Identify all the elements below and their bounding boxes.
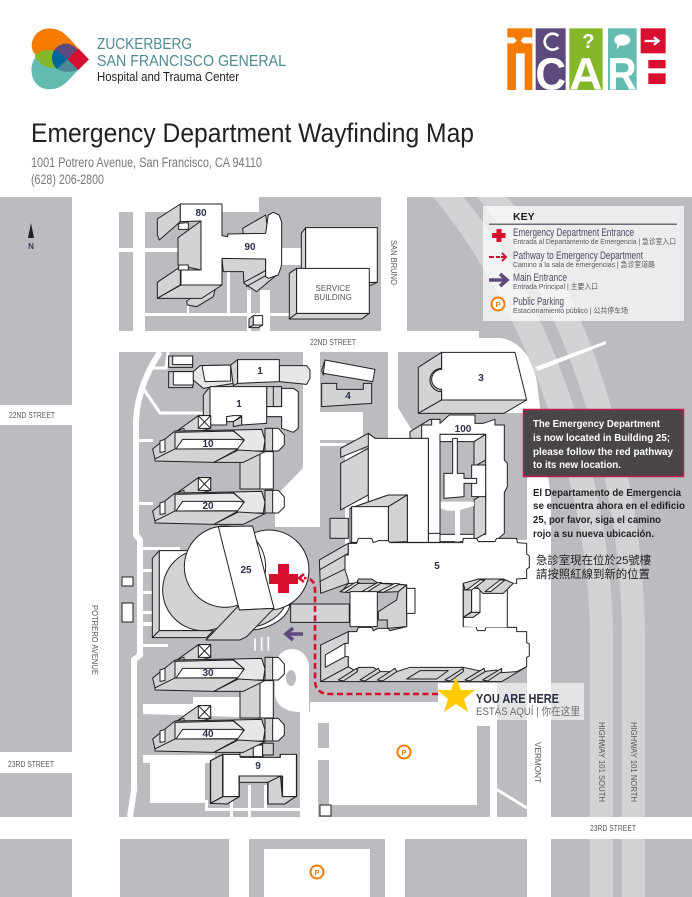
label: estas aqui: ESTÁS AQUÍ | 你在这里 (476, 704, 580, 718)
north arrow (28, 223, 34, 251)
text block: chinese notice: 請按照紅線到新的位置 (536, 567, 650, 581)
icon: purple arrow (489, 274, 507, 286)
callout: english notice: to its new location. (533, 459, 621, 471)
row: main entrance (513, 272, 598, 291)
header logo: Zuckerberg SFGH (31, 28, 286, 89)
street labels: HIGHWAY 101 SOUTH (597, 722, 606, 802)
row: emergency entrance (513, 227, 676, 246)
label: 30: 30 (202, 668, 214, 679)
parking markers: P (401, 748, 407, 757)
row: pathway: Camino a la sala de emergencias | 急诊室道路 (513, 259, 655, 269)
label: 1 upper: 1 (257, 366, 263, 377)
icon: main entrance arrow (286, 628, 303, 640)
label: 40: 40 (202, 729, 214, 740)
small outbuildings (122, 577, 331, 816)
logo mark (31, 28, 89, 89)
icon: red cross (269, 564, 298, 593)
header logo: I CARE: A (569, 48, 603, 99)
building 40 wing (153, 706, 284, 752)
building 10 wing (153, 416, 284, 462)
street labels: 22ND STREET (9, 411, 55, 420)
street labels (8, 240, 638, 833)
arrowhead of pathway (299, 574, 304, 582)
row: public parking (513, 296, 628, 315)
label: 1 lower: 1 (236, 399, 242, 410)
service building (289, 228, 377, 319)
street labels: 22ND STREET (310, 338, 356, 347)
icon: parking (492, 298, 504, 310)
you are here panel (437, 677, 584, 720)
logo wordmark: SAN FRANCISCO GENERAL (97, 53, 286, 70)
street labels: POTRERO AVENUE (90, 605, 99, 675)
address: 1001 Potrero Avenue, San Francisco, CA 94110 (31, 155, 262, 170)
text block: spanish notice: se encuentra ahora en el edificio (533, 500, 685, 512)
building 3 and 4 (322, 352, 527, 413)
row: main entrance: Entrada Principal | 主要入口 (513, 281, 598, 291)
icon: parking: P (495, 300, 501, 309)
label: service building: SERVICE (316, 284, 350, 293)
row: pathway (513, 250, 655, 269)
street labels: 23RD STREET (590, 824, 636, 833)
map base: city blocks and roads (0, 197, 692, 897)
text block: spanish notice: rojo a su nueva ubicación. (533, 528, 654, 540)
parking markers: P (314, 868, 320, 877)
label: 5: 5 (434, 561, 440, 572)
label: 10: 10 (202, 439, 214, 450)
building 30 wing (153, 645, 284, 691)
red dashed pathway (304, 578, 438, 694)
connector between 10 and 20 (240, 452, 273, 489)
label: 100: 100 (455, 424, 472, 435)
small outbuilding near 22nd street (249, 316, 263, 328)
street labels: HIGHWAY 101 NORTH (629, 722, 638, 802)
row: public parking: Public Parking (513, 296, 564, 308)
parking markers (310, 746, 410, 878)
phone: (628) 206-2800 (31, 172, 104, 187)
label: 3: 3 (478, 373, 484, 384)
label: service building (314, 284, 352, 302)
row: emergency entrance: Entrada al Departamento de Emergencia | 急诊室入口 (513, 236, 676, 246)
text block: chinese notice: 急診室現在位於25號樓 (536, 553, 651, 567)
text block: spanish notice (533, 487, 685, 540)
connector between 30 and 40 (240, 681, 273, 718)
north arrow: N (28, 242, 34, 251)
icon: star (437, 677, 475, 712)
callout: english notice: is now located in Building 25; (533, 432, 670, 444)
label: 90: 90 (244, 242, 256, 253)
building 20 wing (153, 478, 284, 524)
key heading: KEY (513, 211, 535, 223)
title: Emergency Department Wayfinding Map (31, 118, 474, 148)
buildings 80 and 90 (157, 204, 282, 307)
label: service building: BUILDING (314, 293, 352, 302)
icon: dashed arrow (489, 253, 506, 261)
buildings 1 (169, 356, 310, 432)
logo wordmark: ZUCKERBERG (97, 36, 192, 53)
row: public parking: Estacionamiento público | 公共停车场 (513, 305, 628, 315)
label: 25: 25 (240, 565, 252, 576)
callout: english notice: please follow the red pathway (533, 446, 673, 458)
row: emergency entrance: Emergency Department Entrance (513, 227, 634, 239)
icon: cross (492, 229, 506, 242)
street labels: 23RD STREET (8, 760, 54, 769)
header logo: I CARE (507, 28, 666, 99)
building 100 (410, 415, 507, 542)
label: 9: 9 (255, 761, 261, 772)
text block: spanish notice: 25, por favor, siga el camino (533, 514, 661, 526)
street labels: SAN BRUNO (389, 240, 398, 285)
logo wordmark (97, 36, 286, 84)
header logo: I CARE: R (607, 48, 637, 99)
text block: chinese notice (536, 553, 651, 581)
building 25 (152, 526, 349, 651)
text block: spanish notice: El Departamento de Emergencia (533, 487, 681, 499)
logo wordmark: Hospital and Trauma Center (97, 70, 239, 84)
row: pathway: Pathway to Emergency Department (513, 250, 643, 262)
building 5 (330, 433, 428, 542)
panel: key (483, 206, 684, 321)
street labels: VERMONT (533, 742, 542, 783)
header logo: I CARE: ? (582, 31, 594, 53)
connector between 40 and 9 (240, 743, 273, 757)
callout: english notice (524, 410, 684, 476)
header logo: I CARE: C (535, 48, 566, 99)
building 9 (211, 744, 297, 804)
label: 20: 20 (202, 501, 214, 512)
label: 80: 80 (195, 208, 207, 219)
label: you are here: YOU ARE HERE (476, 691, 559, 706)
row: main entrance: Main Entrance (513, 272, 567, 284)
callout: english notice: The Emergency Department (533, 418, 660, 430)
label: 4: 4 (345, 391, 351, 402)
